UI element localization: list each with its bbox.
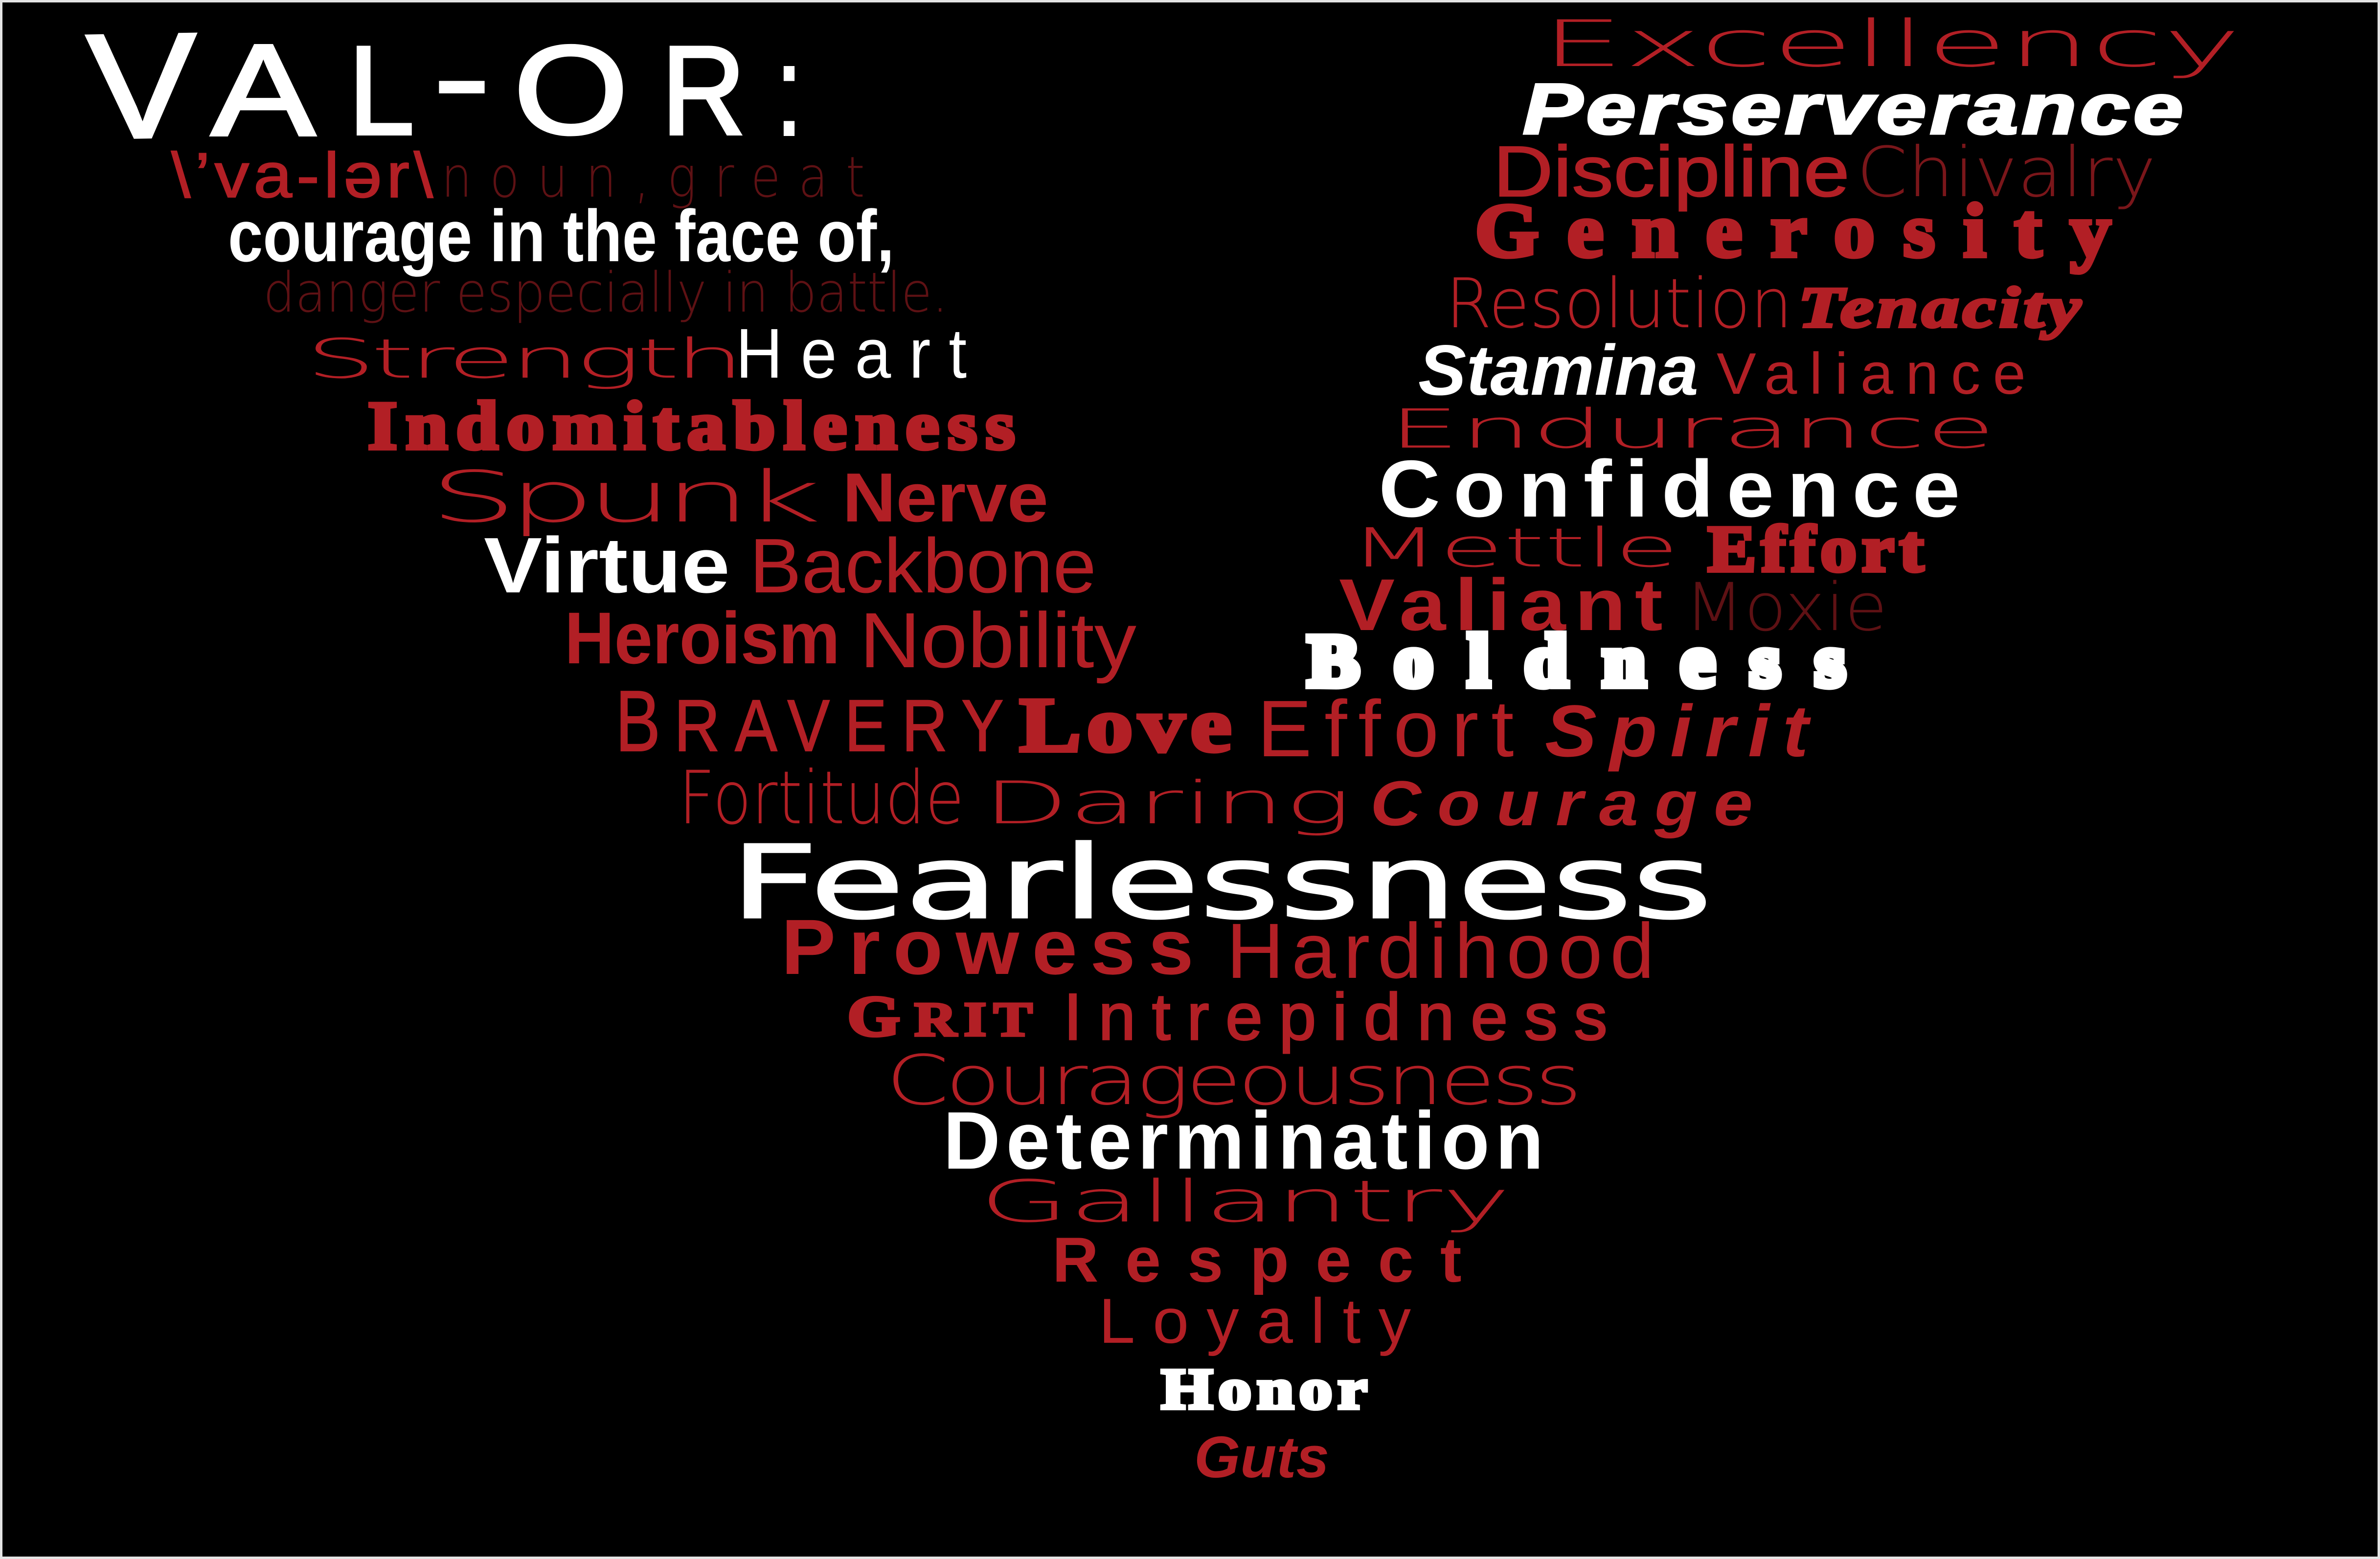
word: Prowess: Prowess	[781, 903, 1206, 991]
word: Discipline: Discipline	[1493, 132, 1850, 212]
word: Effort (bold): Effort	[1708, 513, 1929, 585]
word: Indomitableness: Indomitableness	[368, 388, 1023, 464]
title: VAL-OR:: V	[85, 1, 200, 170]
word: Strength: Strength	[306, 328, 740, 391]
definition: noun, great: noun,great	[441, 145, 883, 210]
word: Valiance: Valiance	[1717, 341, 2038, 407]
word: Honor: Honor	[1161, 1357, 1373, 1421]
word: Tenacity: Tenacity	[1798, 275, 2085, 339]
word: Excellency: Excellency	[1541, 6, 2241, 81]
word: Backbone: Backbone	[749, 523, 1096, 609]
word: Boldness: Boldness	[1308, 620, 1881, 701]
title: VAL-OR:: O	[514, 19, 628, 160]
title: VAL-OR:: R	[661, 20, 746, 161]
word: Spunk: Spunk	[430, 456, 817, 538]
word: BRAVERY	[615, 673, 1019, 769]
word: Guts: Guts	[1194, 1424, 1329, 1490]
word: Heroism: Heroism	[565, 597, 840, 679]
word: Courageousness: Courageousness	[886, 1041, 1578, 1121]
word: Spirit: Spirit	[1545, 690, 1821, 772]
word: Gallantry: Gallantry	[979, 1168, 1511, 1235]
word: Moxie: Moxie	[1684, 569, 1887, 646]
word: Nerve: Nerve	[842, 459, 1048, 537]
word: GRIT: G	[847, 984, 900, 1048]
word: Resolution: Resolution	[1446, 264, 1792, 344]
word: BRAVERY: B	[615, 673, 660, 769]
word: Effort (light): Effort	[1257, 684, 1526, 773]
definition: danger especially in battle.: danger especially in battle.	[263, 261, 948, 325]
word: Fearlessness: Fearlessness	[730, 824, 1712, 942]
title: VAL-OR:: :	[775, 19, 803, 162]
word: Mettle: Mettle	[1349, 517, 1679, 579]
title: VAL-OR:	[85, 1, 803, 170]
word: Confidence: Confidence	[1379, 444, 1973, 534]
word: BRAVERY: RAVERY	[674, 684, 1019, 767]
definition: courage in the face of,: courage in the face of,	[228, 195, 894, 277]
word: Valiant: Valiant	[1339, 564, 1672, 646]
word: Daring: Daring	[983, 769, 1352, 837]
title: VAL-OR:: L	[348, 20, 414, 161]
word: Nobility: Nobility	[860, 596, 1136, 684]
word: Heart: Heart	[736, 314, 985, 393]
word: Fortitude: Fortitude	[679, 756, 964, 841]
word: Hardihood: Hardihood	[1226, 907, 1662, 994]
word: Perserverance: Perserverance	[1523, 69, 2187, 149]
word: Courage: Courage	[1370, 768, 1769, 839]
word: Virtue: Virtue	[484, 521, 730, 610]
word: GRIT	[847, 984, 1040, 1048]
word: Endurance: Endurance	[1388, 398, 1995, 460]
definition: pronunciation: \’va-lər\	[171, 139, 437, 211]
word: Stamina: Stamina	[1418, 330, 1699, 410]
word: Generosity: Generosity	[1475, 188, 2139, 273]
word: Determination: Determination	[943, 1095, 1549, 1186]
title: VAL-OR:: -	[433, 5, 491, 149]
title: VAL-OR:: A	[211, 18, 316, 163]
word: Chivalry: Chivalry	[1857, 133, 2156, 213]
word: Respect: Respect	[1052, 1224, 1488, 1295]
word: Loyalty: Loyalty	[1099, 1285, 1428, 1356]
word: Intrepidness: Intrepidness	[1064, 980, 1624, 1054]
word: GRIT: RIT	[914, 992, 1040, 1046]
word: Love: Love	[1020, 682, 1237, 768]
